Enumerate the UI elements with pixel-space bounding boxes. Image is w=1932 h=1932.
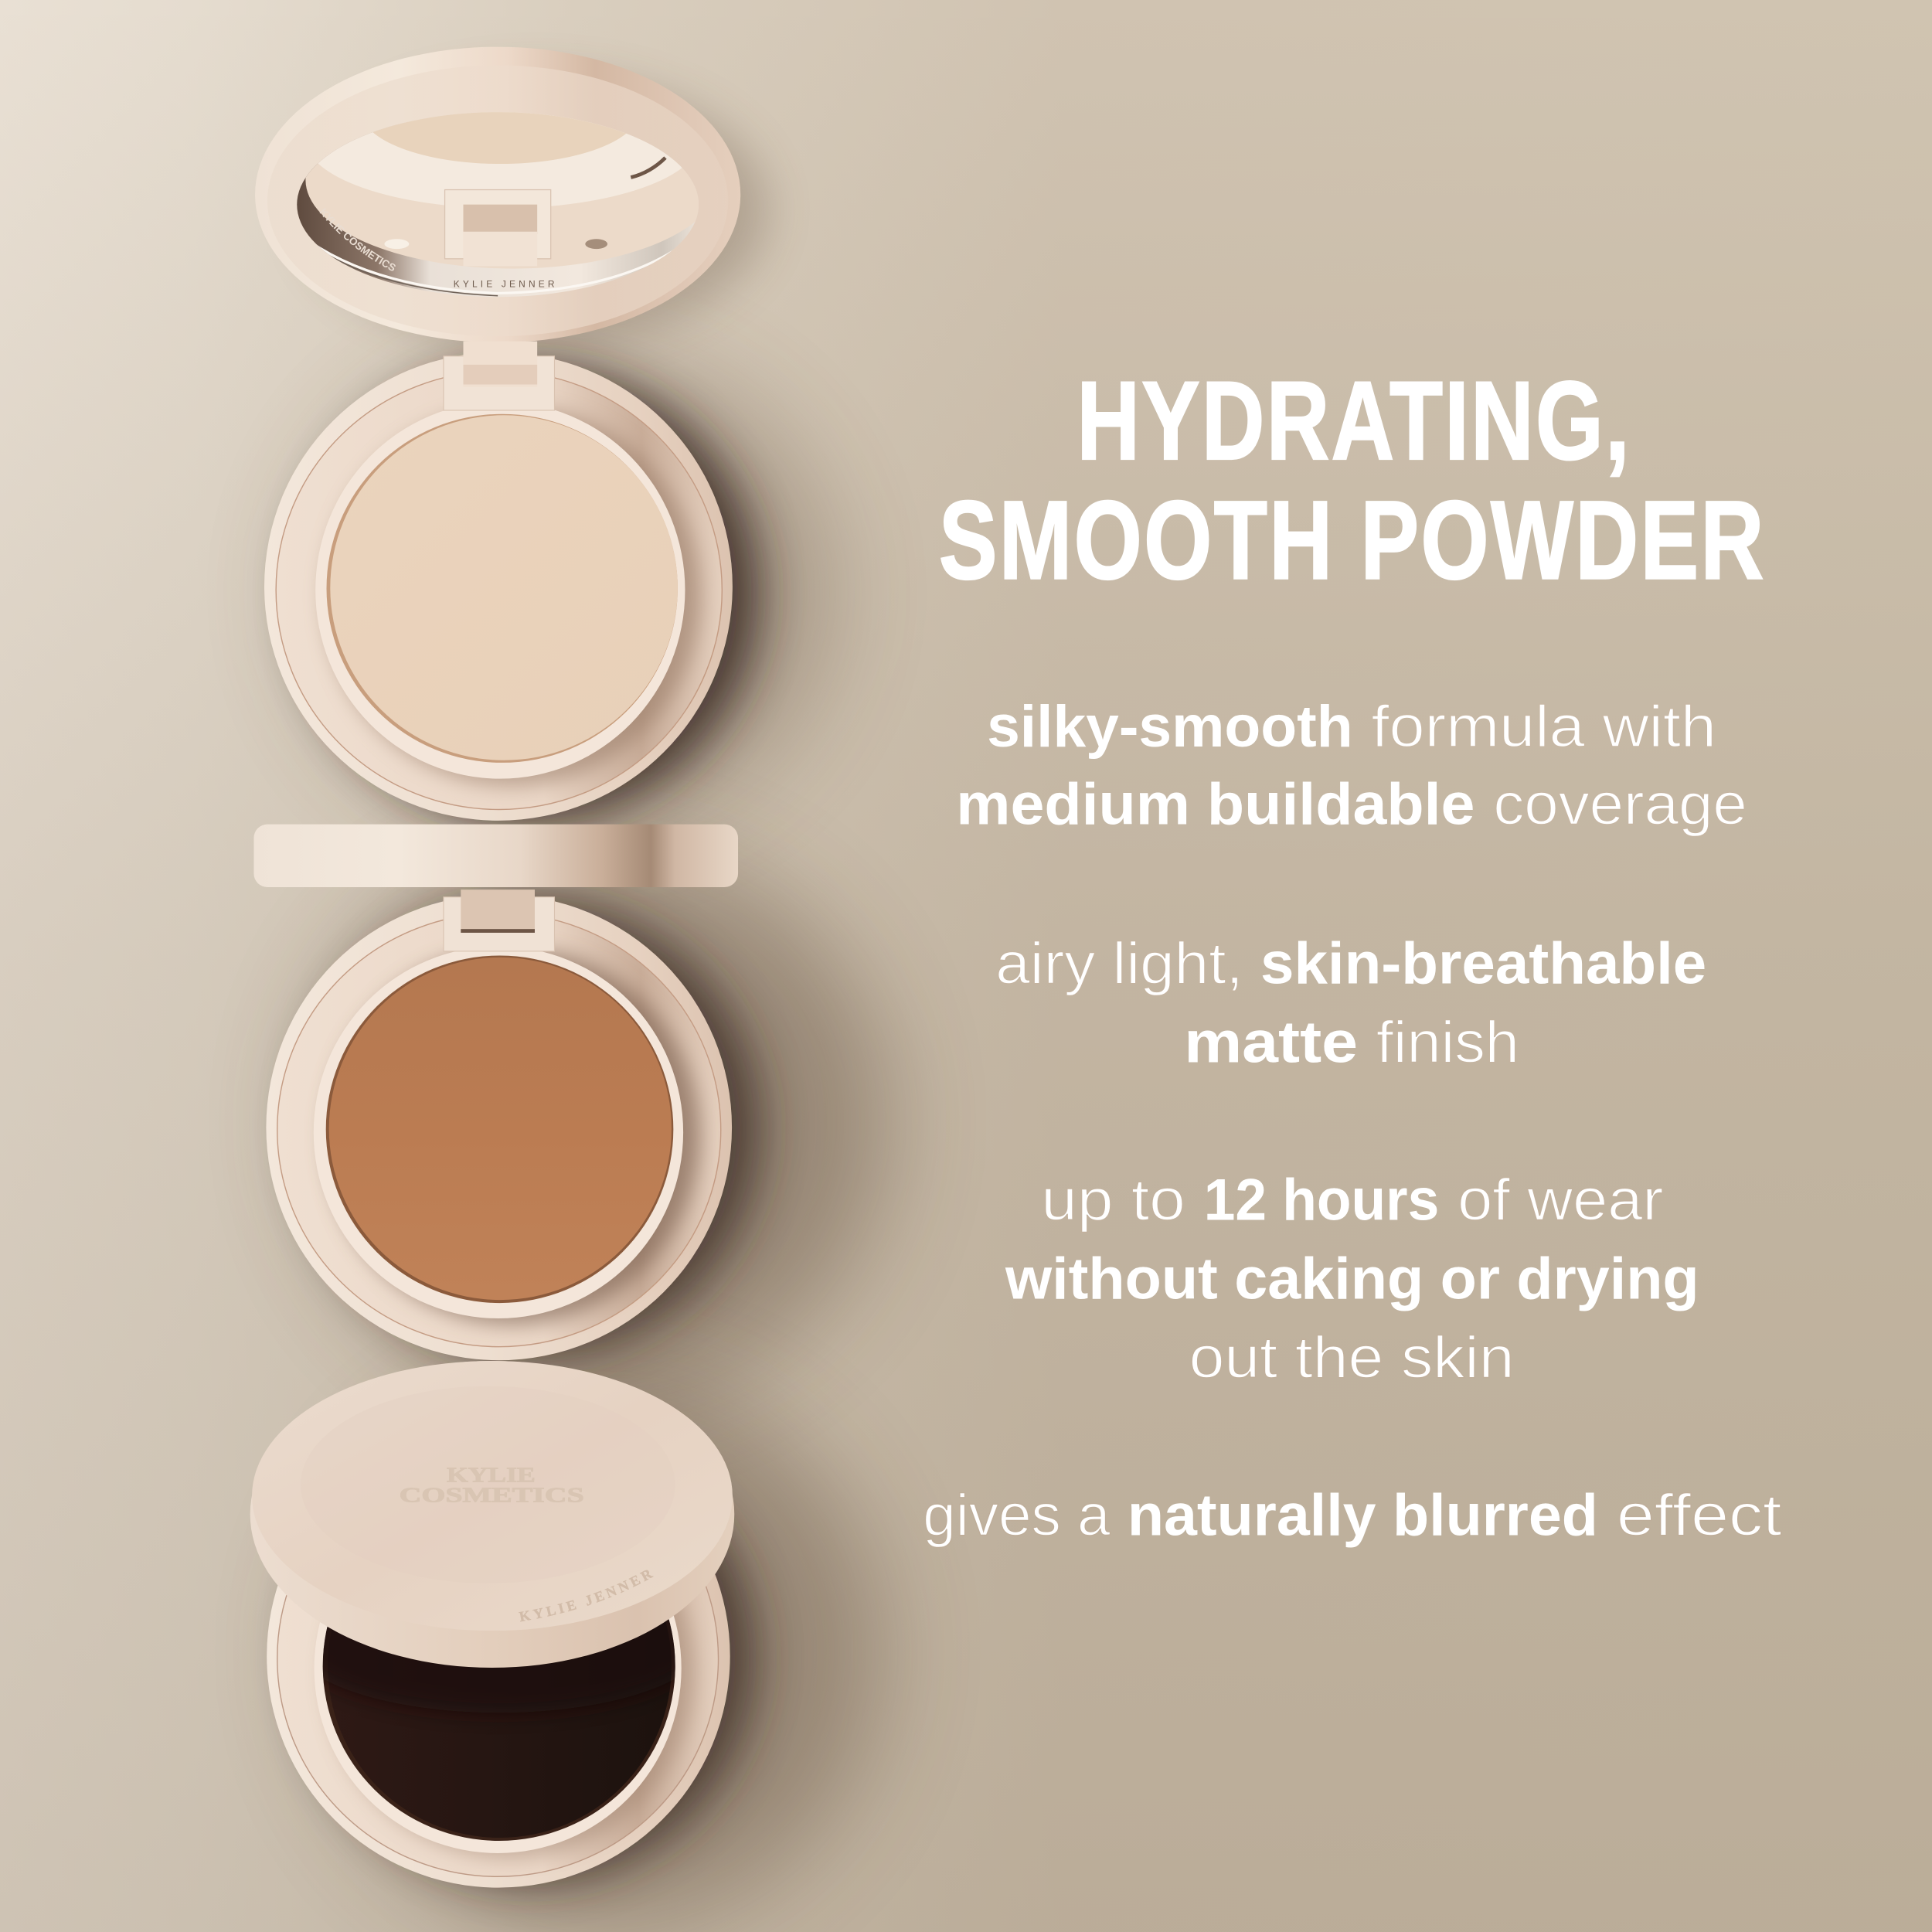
benefit: silky-smooth formula: coverage (1493, 772, 1747, 838)
benefit: naturally blurred effect: gives a (923, 1483, 1111, 1549)
compact base 2 (266, 895, 732, 1360)
compact base 3 (267, 1424, 730, 1888)
embossed logo: COSMETICS (400, 1484, 584, 1508)
title: HYDRATING, (1077, 358, 1631, 483)
benefit: matte finish: airy light, (995, 930, 1243, 996)
compact 2: medium caramel shade with lid seen side-on (253, 825, 738, 1360)
compact 1: light shade with open mirror lid (255, 46, 740, 821)
embossed logo: KYLIE (447, 1463, 536, 1487)
side-on lid (253, 825, 738, 887)
powder pan 2 (314, 946, 683, 1318)
hinge 2 (444, 889, 554, 951)
mirror opening and reflection (297, 112, 699, 297)
benefit: silky-smooth formula: formula with (1372, 694, 1716, 760)
benefit: 12 hours of wear: up to (1041, 1167, 1185, 1233)
mirror opening and reflection: KYLIE JENNER (454, 278, 557, 289)
mirror opening and reflection: KYLIE COSMETICS (320, 209, 396, 270)
cast shadows behind compacts (301, 77, 887, 1928)
benefit: naturally blurred effect: naturally blurred (1128, 1483, 1598, 1549)
compact 3: deep shade with closing lid (250, 1361, 734, 1888)
benefit: naturally blurred effect (923, 1483, 1781, 1549)
benefit: silky-smooth formula: medium buildable (956, 772, 1475, 838)
embossed logo (400, 1463, 584, 1508)
benefit: matte finish (995, 930, 1706, 1075)
open mirror lid (255, 46, 740, 342)
lid of compact 3 (250, 1361, 734, 1668)
powder pan 3 (314, 1615, 682, 1853)
powder pan 1 (315, 402, 685, 779)
benefit: silky-smooth formula (956, 694, 1747, 838)
benefit: matte finish: finish (1376, 1009, 1519, 1075)
benefit: 12 hours of wear: out the skin (1189, 1325, 1515, 1391)
inner hinge on lid (384, 190, 607, 266)
benefit: silky-smooth formula: silky-smooth (987, 694, 1353, 760)
hinge 1 (444, 342, 554, 410)
benefit: matte finish: matte (1184, 1009, 1358, 1075)
benefit: 12 hours of wear (1005, 1167, 1699, 1391)
embossed name on rim: KYLIE JENNER (519, 1570, 654, 1621)
compact base 1 (264, 352, 733, 821)
benefit: 12 hours of wear: 12 hours (1204, 1167, 1439, 1233)
benefit: matte finish: skin-breathable (1260, 930, 1706, 996)
benefit: 12 hours of wear: of wear (1458, 1167, 1663, 1233)
benefit: naturally blurred effect: effect (1617, 1483, 1781, 1549)
benefit: 12 hours of wear: without caking or drying (1005, 1246, 1699, 1311)
title (939, 358, 1766, 603)
